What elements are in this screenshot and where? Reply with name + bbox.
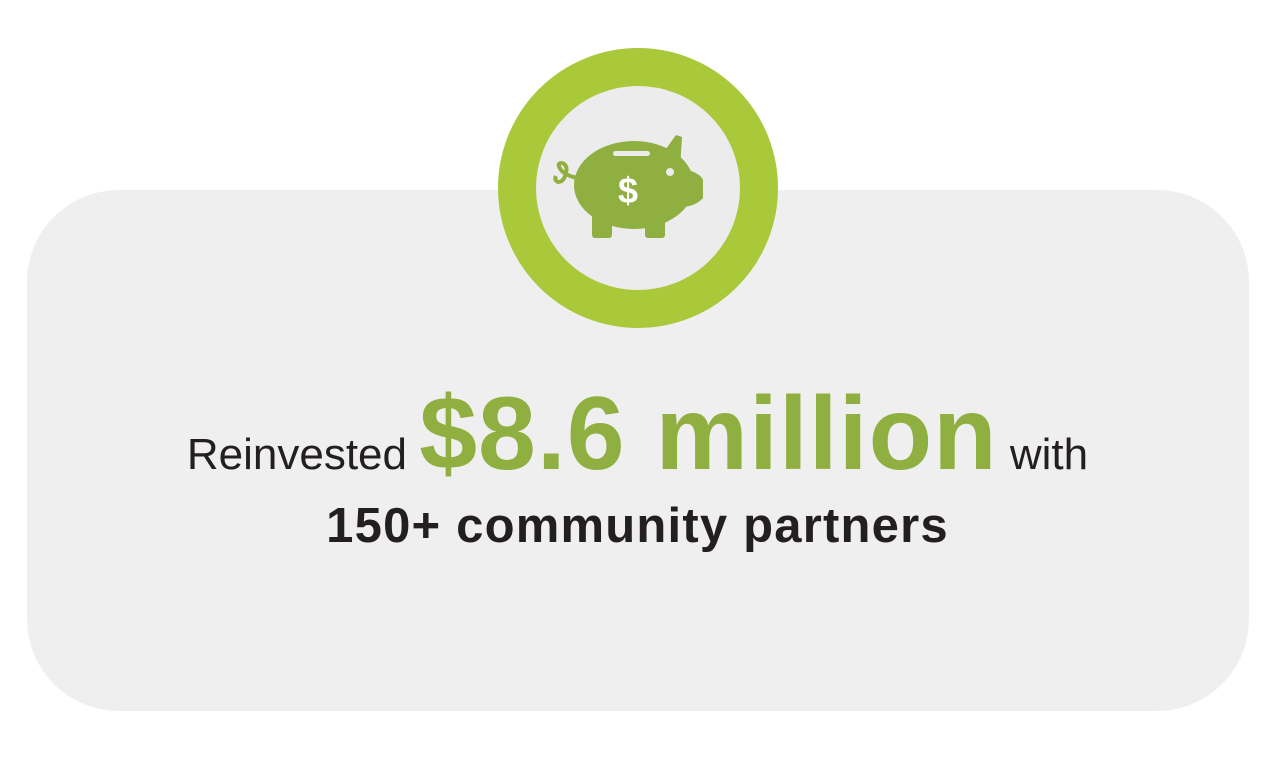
text: headline line 2: 150+ community partners: [326, 499, 949, 553]
icon: piggy bank: [555, 135, 703, 238]
panel: background card: [27, 190, 1249, 711]
icon: piggy bank badge: $: [618, 170, 638, 211]
text: headline line 1: Reinvested $8.6 million with: [187, 376, 1088, 492]
